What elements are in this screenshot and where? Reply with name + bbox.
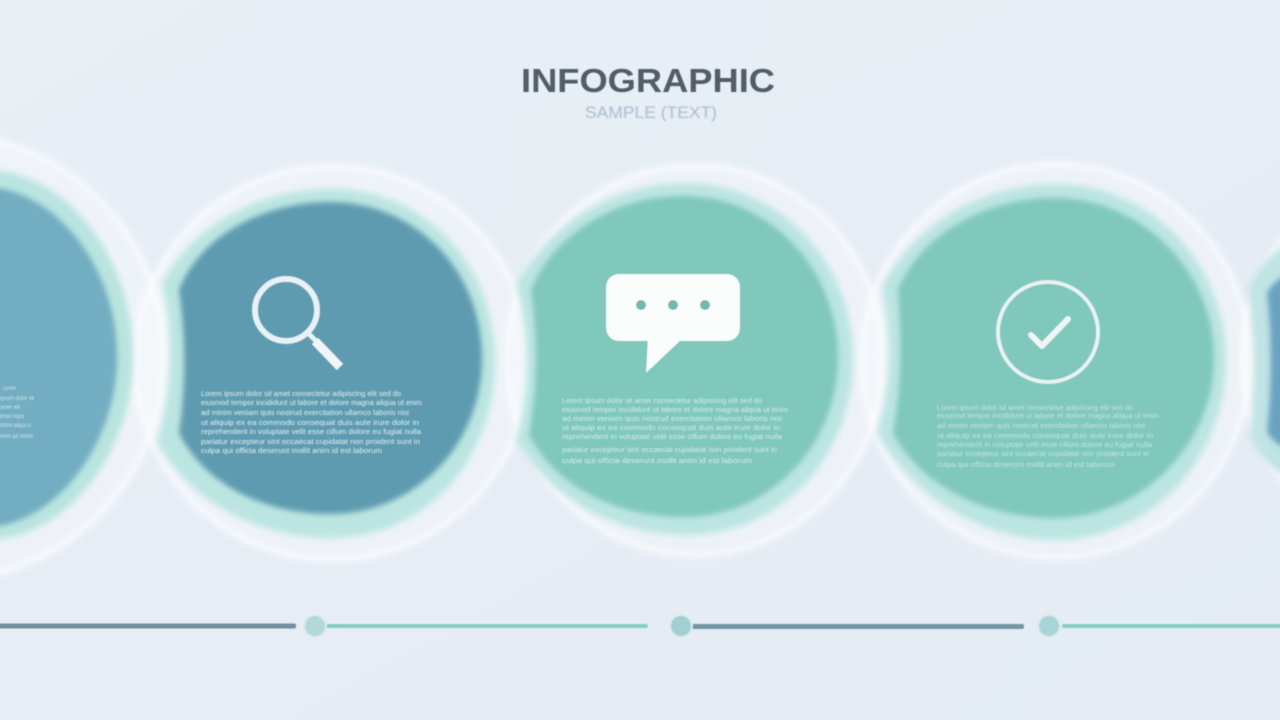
body text: search circle: ad minim veniam quis nostrud exercitation ullamco laboris nisi [201,410,409,417]
body text: check circle: culpa qui officia deserunt mollit anim id est laborum [937,462,1115,469]
body text: search circle [201,391,422,455]
body text: left circle: ipsum dolor sit [0,396,34,402]
timeline segment: blue 2 [692,624,1024,629]
timeline segment: blue 1 [0,624,296,628]
timeline node 3 [1038,615,1060,637]
icon: check mark [998,282,1098,382]
body text: check circle: pariatur excepteur sint occaecat cupidatat non proident sunt in [937,451,1149,458]
body text: chat circle: eiusmod tempor incididunt ut labore et dolore magna aliqua ut enim [562,407,788,414]
body text: chat circle: Lorem ipsum dolor sit amet consectetur adipiscing elit sed do [562,398,762,405]
body text: check circle [937,405,1159,469]
light halo discs behind all circles [0,131,1280,583]
timeline node 1 [304,615,326,637]
body text: left circle [0,386,34,440]
body text: search circle: Lorem ipsum dolor sit amet consectetur adipiscing elit sed do [201,391,401,398]
panel: search circle [157,189,495,538]
panel: right partial circle [1248,243,1280,480]
body text: search circle: culpa qui officia deserunt mollit anim id est laborum [201,448,382,455]
body text: search circle: eiusmod tempor incididunt ut labore et dolore magna aliqua ut enim [201,400,422,407]
panel: left partial circle [0,170,133,540]
body text: left circle: tempor magna [0,414,24,420]
timeline segment: green 1 [326,624,648,628]
subtitle: SAMPLE (TEXT) [585,103,717,122]
body text: left circle: Lorem [3,386,16,392]
body text: check circle: Lorem ipsum dolor sit amet consectetur adipiscing elit sed do [937,405,1133,412]
body text: chat circle: pariatur excepteur sint occaecat cupidatat non proident sunt in [562,447,777,454]
body text: search circle: pariatur excepteur sint occaecat cupidatat non proident sunt in [201,439,420,446]
body text: check circle: ut aliquip ex ea commodo consequat duis aute irure dolor in [937,433,1153,440]
body text: chat circle [562,398,788,465]
body text: search circle: reprehenderit in voluptate velit esse cillum dolore eu fugiat nulla [201,429,421,436]
icon: speech bubble [606,274,740,373]
body text: left circle: enim ad minim [0,434,33,440]
body text: check circle: reprehenderit in voluptate velit esse cillum dolore eu fugiat nulla [937,442,1152,449]
icon: magnifying glass [255,279,340,367]
timeline [0,615,1280,637]
body text: left circle: dolore aliqua ut [0,423,31,429]
body text: check circle: eiusmod tempor incididunt ut labore et dolore magna aliqua ut enim [937,413,1159,420]
body text: chat circle: reprehenderit in voluptate velit esse cillum dolore eu fugiat nulla [562,434,782,441]
body text: left circle: amet elit [0,405,20,411]
title: INFOGRAPHIC [521,62,775,99]
panel: check circle [877,184,1226,540]
body text: check circle: ad minim veniam quis nostrud exercitation ullamco laboris nisi [937,423,1145,430]
body text: chat circle: ad minim veniam quis nostrud exercitation ullamco laboris nisi [562,416,783,423]
body text: search circle: ut aliquip ex ea commodo consequat duis aute irure dolor in [201,420,419,427]
panel: chat circle [516,183,853,535]
timeline node 2 [670,615,692,637]
timeline segment: green 2 [1062,624,1280,628]
body text: chat circle: culpa qui officia deserunt mollit anim id est laborum [562,458,752,465]
body text: chat circle: ut aliquip ex ea commodo consequat duis aute irure dolor in [562,425,780,432]
